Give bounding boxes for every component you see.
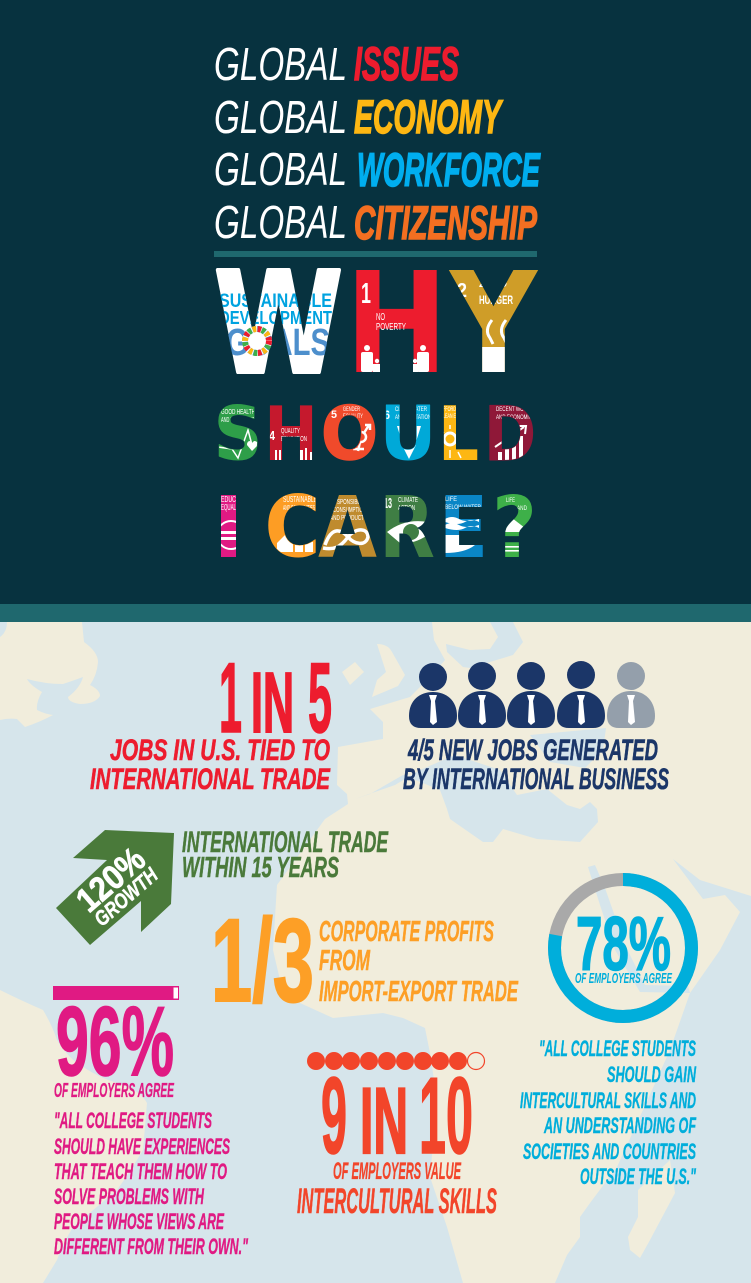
letter H: no poverty: H bbox=[345, 243, 448, 406]
letter U: clean water: CLEAN WATER bbox=[395, 407, 427, 413]
letter H: no poverty: 1 bbox=[361, 278, 371, 310]
quote: experiences: "ALL COLLEGE STUDENTS bbox=[54, 1108, 212, 1133]
stat: 9 in 10 employers value intercultural skills: 10 bbox=[419, 1055, 473, 1177]
title lines: ECONOMY bbox=[354, 90, 503, 143]
title lines: GLOBAL bbox=[214, 91, 347, 143]
letter C: sustainable cities: AND COMMUNITIES bbox=[283, 505, 315, 512]
title lines: GLOBAL bbox=[214, 143, 347, 195]
quote: experiences: SOLVE PROBLEMS WITH bbox=[54, 1184, 205, 1209]
letter L: clean energy: L bbox=[438, 390, 479, 478]
icon: five business people bbox=[409, 661, 655, 728]
letter D: decent work: DECENT WORK bbox=[496, 407, 530, 413]
stat: 1 in 5 jobs: INTERNATIONAL TRADE bbox=[90, 763, 331, 796]
title lines: GLOBAL bbox=[214, 196, 347, 248]
title lines: GLOBAL bbox=[214, 38, 347, 90]
teal band bbox=[0, 604, 751, 622]
letter R: climate action: 13 bbox=[384, 495, 392, 512]
stat: 9 in 10 employers value intercultural skills bbox=[297, 1055, 497, 1221]
title lines: CITIZENSHIP bbox=[354, 196, 537, 249]
stat: 96% of employers agree: OF EMPLOYERS AGREE bbox=[54, 1080, 174, 1102]
letter R: climate action bbox=[386, 495, 434, 557]
donut chart: 78% of employers agree: 78% bbox=[576, 902, 671, 987]
question mark: life on land: ON LAND bbox=[506, 506, 528, 512]
letter U: clean water: 6 bbox=[384, 408, 390, 422]
donut chart: 78% of employers agree bbox=[554, 880, 692, 1016]
letter Y: zero hunger: 2 bbox=[457, 280, 467, 302]
letter H: quality education: QUALITY bbox=[281, 428, 300, 435]
letter C: sustainable cities: C bbox=[265, 478, 320, 576]
stat: 1 in 5 jobs bbox=[90, 642, 332, 796]
letter A: responsible consumption: AND PRODUCT bbox=[330, 515, 364, 522]
stat: 9 in 10 employers value intercultural skills: IN bbox=[360, 1068, 408, 1173]
letter U: clean water: U bbox=[380, 391, 436, 477]
letter O: gender equality: GENDER bbox=[343, 407, 360, 413]
letter D: decent work: AND ECONOMIC bbox=[496, 415, 533, 421]
letter A: responsible consumption: CONSUMPTION bbox=[333, 507, 366, 514]
stat: 1 in 5 jobs: JOBS IN U.S. TIED TO bbox=[110, 734, 330, 767]
letter H: quality education bbox=[270, 405, 312, 460]
letter D: decent work: D bbox=[484, 390, 536, 478]
letter O: gender equality: 5 bbox=[331, 409, 337, 421]
title lines: ISSUES bbox=[354, 37, 459, 90]
letter Y: zero hunger: Y bbox=[448, 243, 538, 406]
quote: experiences: SHOULD HAVE EXPERIENCES bbox=[54, 1134, 230, 1159]
letter Y: zero hunger bbox=[448, 270, 538, 372]
letter A: responsible consumption: SPONSIBLE bbox=[337, 499, 363, 506]
stat: international trade within 15 years: INTERNATIONAL TRADE bbox=[182, 826, 389, 859]
arrow: 120% growth bbox=[56, 830, 174, 945]
letter W: W bbox=[214, 243, 343, 406]
stat: 9 in 10 employers value intercultural skills: OF EMPLOYERS VALUE bbox=[333, 1158, 461, 1185]
stat: 1/3 corporate profits: IMPORT-EXPORT TRADE bbox=[319, 976, 519, 1008]
text: INTERCULTURAL SKILLS bbox=[297, 1182, 497, 1221]
letter W bbox=[216, 268, 341, 374]
letter C: sustainable cities bbox=[268, 493, 316, 558]
title lines bbox=[214, 37, 541, 249]
letter O: gender equality: O bbox=[321, 392, 378, 477]
letter E: life below water: E bbox=[439, 479, 488, 578]
text: 5 bbox=[308, 642, 332, 753]
letter W: GOALS bbox=[226, 322, 330, 364]
letter E: life below water bbox=[446, 495, 483, 557]
stat: 1/3 corporate profits: FROM bbox=[319, 945, 371, 977]
letter H: quality education: EDUCATION bbox=[281, 436, 307, 443]
stat: 4/5 new jobs bbox=[403, 734, 669, 796]
letter O: gender equality bbox=[324, 404, 376, 461]
letter W: SUSTAINABLE bbox=[219, 291, 332, 312]
letter U: clean water: AND SANITATION bbox=[395, 415, 431, 421]
question mark: life on land: ? bbox=[492, 479, 537, 578]
stat: 1 in 5 jobs: IN bbox=[251, 656, 294, 751]
title lines: WORKFORCE bbox=[357, 143, 541, 196]
letter H: no poverty: POVERTY bbox=[376, 322, 406, 333]
letter H: no poverty bbox=[356, 270, 437, 372]
quote: intercultural skills bbox=[520, 1036, 697, 1189]
letter A: responsible consumption: A bbox=[318, 479, 377, 578]
stat: 9 in 10 employers value intercultural skills: 9 bbox=[321, 1055, 347, 1177]
letter W: DEVELOPMENT bbox=[219, 308, 332, 328]
quote: experiences: PEOPLE WHOSE VIEWS ARE bbox=[54, 1209, 225, 1234]
letter S: good health: GOOD HEALTH bbox=[221, 409, 255, 416]
letter S: good health bbox=[218, 404, 258, 460]
stat: 1/3 corporate profits bbox=[211, 895, 519, 1027]
letter L: clean energy: LEAN E bbox=[443, 414, 456, 420]
letter H: quality education: 4 bbox=[269, 428, 276, 443]
quote: experiences bbox=[54, 1108, 248, 1259]
stat: international trade within 15 years: WITHIN 15 YEARS bbox=[182, 852, 339, 884]
letter U: clean water bbox=[386, 404, 430, 460]
letter I: reduced inequalities: EQUAL bbox=[221, 503, 236, 512]
letter L: clean energy: FFORD bbox=[443, 407, 456, 413]
title divider bbox=[214, 251, 537, 257]
question mark: life on land: LIFE bbox=[506, 498, 515, 504]
world map background bbox=[0, 622, 751, 1283]
stat: international trade within 15 years bbox=[182, 826, 389, 884]
letter L: clean energy bbox=[444, 405, 478, 460]
progress bar: 96% bbox=[53, 986, 179, 1000]
stat: 96% of employers agree bbox=[54, 986, 174, 1102]
letter D: decent work bbox=[489, 404, 534, 460]
stat: 1 in 5 jobs: 1 bbox=[219, 642, 242, 753]
letter R: climate action: CLIMATE bbox=[398, 497, 418, 504]
letter S: good health: S bbox=[214, 392, 262, 477]
stat: 1/3 corporate profits: CORPORATE PROFITS bbox=[319, 916, 494, 948]
letter I: reduced inequalities: EDUC bbox=[221, 495, 236, 504]
letter R: climate action: R bbox=[379, 479, 435, 578]
letter C: sustainable cities: SUSTAINABLE bbox=[283, 495, 317, 504]
letter Y: zero hunger: ZERO bbox=[479, 279, 507, 290]
letter A: responsible consumption bbox=[318, 495, 377, 557]
header background bbox=[0, 0, 751, 604]
letter Y: zero hunger: HUNGER bbox=[479, 293, 513, 307]
letter S: good health: AND WELL-BEING bbox=[221, 417, 255, 424]
quote: experiences: DIFFERENT FROM THEIR OWN." bbox=[54, 1234, 248, 1259]
stat: 1/3 corporate profits: 1/3 bbox=[211, 895, 314, 1027]
quote: experiences: THAT TEACH THEM HOW TO bbox=[54, 1159, 227, 1184]
letter O: gender equality: EQUALITY bbox=[343, 414, 363, 420]
letter H: no poverty: NO bbox=[376, 312, 385, 323]
arrow: 120% growth: 120% bbox=[69, 840, 153, 920]
question mark: life on land bbox=[497, 494, 532, 557]
stat: 96% of employers agree: 96% bbox=[56, 986, 174, 1096]
dots: nine of ten bbox=[307, 1052, 484, 1070]
donut chart: 78% of employers agree: OF EMPLOYERS AGREE bbox=[575, 970, 673, 987]
letter R: climate action: ACTION bbox=[398, 505, 415, 512]
arrow: 120% growth: GROWTH bbox=[90, 863, 163, 931]
letter E: life below water: BELOW WATER bbox=[445, 505, 482, 511]
letter E: life below water: LIFE bbox=[445, 497, 457, 503]
letter I: reduced inequalities bbox=[221, 495, 236, 557]
letter H: quality education: H bbox=[264, 390, 318, 478]
